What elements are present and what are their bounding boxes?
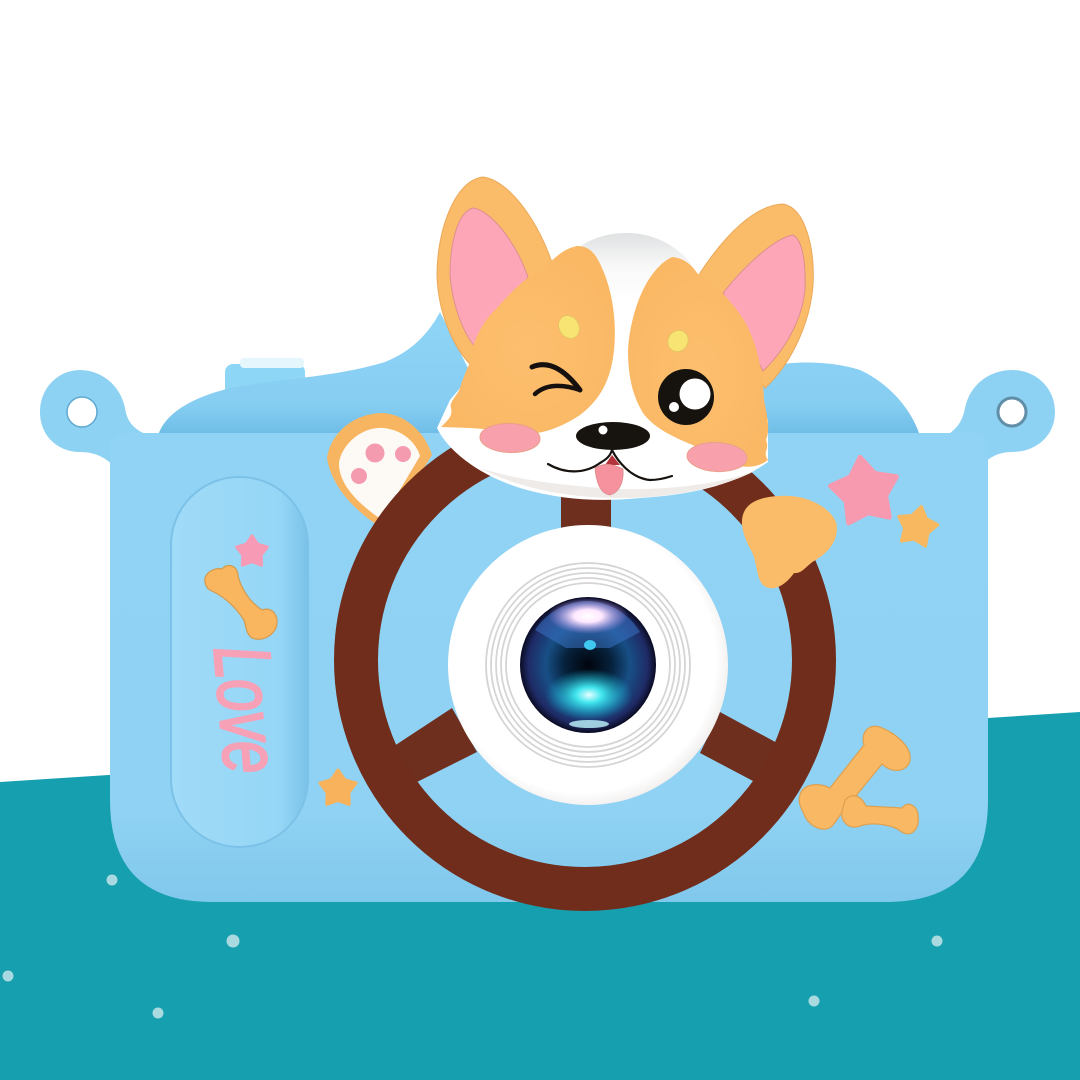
left paw — [327, 413, 432, 530]
background: teal wave — [0, 712, 1080, 1080]
spoke right — [700, 712, 790, 790]
mouth interior — [605, 455, 620, 465]
corgi head — [437, 233, 768, 500]
right ear — [700, 204, 813, 388]
camera top hump — [158, 312, 920, 436]
cheek right — [686, 441, 748, 473]
left orange patch — [441, 246, 615, 433]
lens — [520, 597, 656, 733]
forehead dots — [554, 312, 692, 356]
grip bone — [205, 565, 277, 639]
left ear — [437, 177, 552, 366]
decorative dots — [2, 874, 942, 1018]
pink star — [827, 453, 902, 525]
shutter button — [225, 358, 305, 400]
spoke top — [561, 480, 611, 540]
grip love text: Love — [197, 642, 297, 777]
camera body — [110, 433, 988, 902]
bones lower right — [799, 726, 918, 834]
mouth — [548, 450, 672, 480]
winking eye — [532, 365, 580, 394]
open eye — [658, 369, 714, 425]
spoke left — [385, 708, 477, 788]
head shade — [480, 468, 756, 498]
gold star — [894, 502, 941, 548]
strap lug right — [945, 370, 1055, 462]
cheek left — [480, 422, 540, 454]
tongue — [595, 464, 623, 495]
small gold star — [320, 770, 356, 804]
strap lug left — [40, 370, 150, 468]
ring — [356, 431, 814, 889]
hand grip — [171, 477, 308, 847]
lens housing — [448, 525, 728, 805]
grip star — [237, 536, 267, 565]
right orange patch — [628, 257, 768, 467]
nose — [576, 422, 650, 450]
steering ring strap — [356, 431, 814, 889]
right paw — [742, 496, 837, 588]
head white base — [437, 233, 768, 500]
